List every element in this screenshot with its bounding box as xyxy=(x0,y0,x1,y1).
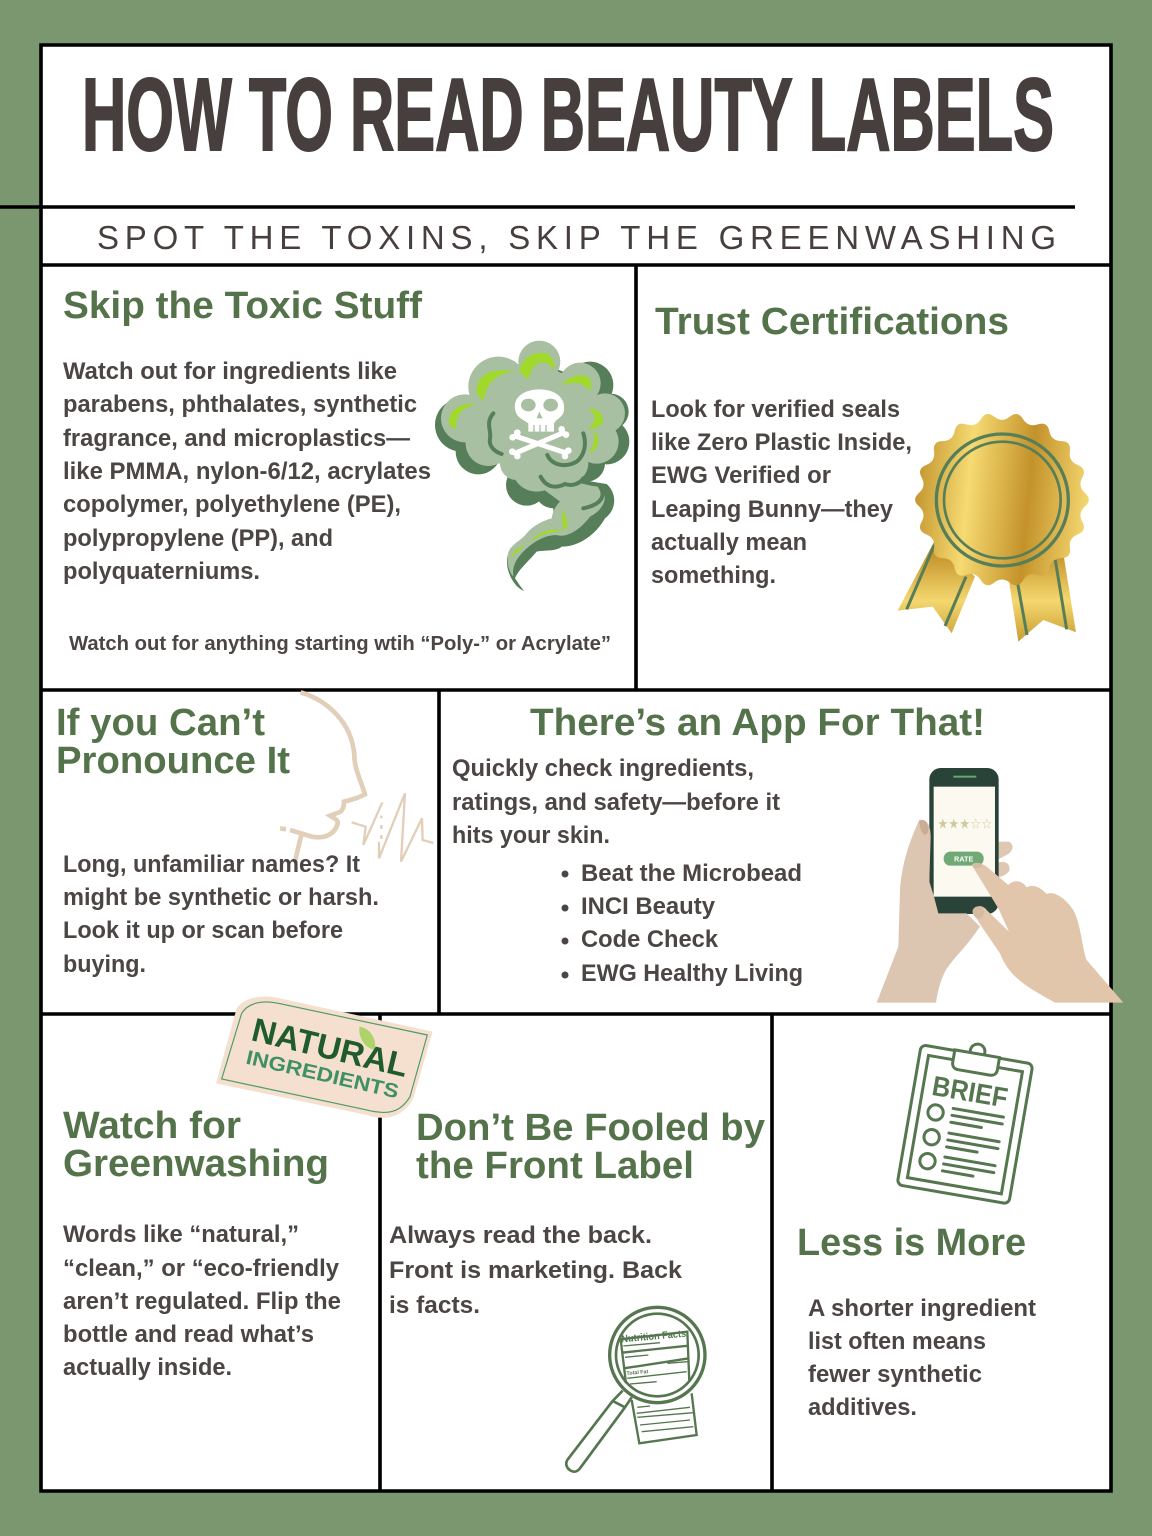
list: recommended apps xyxy=(562,860,803,987)
text block: poly tip: Watch out for anything starting wtih “Poly-” or Acrylate” xyxy=(69,632,611,655)
heading: don't be fooled xyxy=(416,1107,765,1187)
text block: toxic ingredients: copolymer, polyethylene (PE), xyxy=(63,491,401,518)
text block: app intro: ratings, and safety—before it xyxy=(452,789,780,816)
icon: gold award ribbon xyxy=(898,414,1089,642)
skull xyxy=(509,389,572,459)
text block: shorter list: additives. xyxy=(808,1394,917,1421)
heading: trust certifications: Trust Certifications xyxy=(655,301,1009,343)
icon: magnifying glass over nutrition facts: Total Fat xyxy=(626,1369,649,1377)
list: recommended apps: INCI Beauty xyxy=(581,893,715,920)
heading: don't be fooled: the Front Label xyxy=(416,1145,694,1187)
text block: toxic ingredients xyxy=(63,358,431,585)
heading: watch for greenwashing: Greenwashing xyxy=(63,1143,329,1185)
text block: greenwashing: bottle and read what’s xyxy=(63,1321,314,1348)
text block: front label: Front is marketing. Back xyxy=(389,1257,682,1284)
text block: shorter list: fewer synthetic xyxy=(808,1361,982,1388)
text block: front label: is facts. xyxy=(389,1292,480,1319)
text block: certifications: Look for verified seals xyxy=(651,396,900,423)
heading: if you can't pronounce it: If you Can’t xyxy=(56,702,265,744)
icon: hands holding phone: RATE xyxy=(954,854,973,863)
icon: hands holding phone: ★★★☆☆ xyxy=(937,817,992,833)
text block: greenwashing: actually inside. xyxy=(63,1354,232,1381)
icon: clipboard brief xyxy=(897,1035,1035,1204)
icon: hands holding phone xyxy=(877,768,1123,1003)
panel: less is more xyxy=(797,1035,1036,1421)
text block: greenwashing: Words like “natural,” xyxy=(63,1221,299,1248)
text block: toxic ingredients: fragrance, and microplastics— xyxy=(63,425,410,452)
text block: certifications: something. xyxy=(651,562,776,589)
heading: don't be fooled: Don’t Be Fooled by xyxy=(416,1107,765,1149)
icon: clipboard brief: BRIEF xyxy=(930,1070,1010,1114)
text block: pronounce: Look it up or scan before xyxy=(63,917,343,944)
text block: certifications: Leaping Bunny—they xyxy=(651,496,893,523)
text block: toxic ingredients: like PMMA, nylon-6/12, acrylates xyxy=(63,458,431,485)
text block: toxic ingredients: polyquaterniums. xyxy=(63,558,260,585)
panel: don't be fooled by the front label xyxy=(389,1107,765,1472)
icon: natural ingredients sticker xyxy=(216,997,433,1118)
text block: greenwashing: aren’t regulated. Flip the xyxy=(63,1288,341,1315)
text block: toxic ingredients: polypropylene (PP), and xyxy=(63,525,333,552)
text block: toxic ingredients: parabens, phthalates, synthetic xyxy=(63,391,417,418)
panel: if you can't pronounce it xyxy=(56,692,433,978)
icon: toxic smoke cloud with skull xyxy=(435,341,629,591)
panel: there's an app for that xyxy=(452,702,1123,1003)
text block: shorter list xyxy=(808,1295,1036,1421)
panel: trust certifications xyxy=(651,301,1089,642)
list: recommended apps: Code Check xyxy=(581,926,718,953)
text block: greenwashing xyxy=(63,1221,341,1381)
text block: certifications: EWG Verified or xyxy=(651,462,831,489)
text block: pronounce: might be synthetic or harsh. xyxy=(63,884,379,911)
heading: watch for greenwashing: Watch for xyxy=(63,1105,241,1147)
text block: certifications: actually mean xyxy=(651,529,807,556)
icon: natural ingredients sticker: INGREDIENTS xyxy=(244,1047,401,1103)
text block: front label xyxy=(389,1222,682,1319)
text block: front label: Always read the back. xyxy=(389,1222,652,1249)
icon: natural ingredients sticker: NATURAL xyxy=(248,1012,412,1085)
text block: app intro: Quickly check ingredients, xyxy=(452,755,754,782)
text block: shorter list: list often means xyxy=(808,1328,986,1355)
heading: less is more: Less is More xyxy=(797,1222,1026,1264)
text block: app intro xyxy=(452,755,780,849)
heading: skip the toxic stuff: Skip the Toxic Stuff xyxy=(63,285,422,327)
text block: greenwashing: “clean,” or “eco-friendly xyxy=(63,1255,339,1282)
text block: certifications: like Zero Plastic Inside, xyxy=(651,429,912,456)
text block: pronounce: buying. xyxy=(63,951,146,978)
text block: shorter list: A shorter ingredient xyxy=(808,1295,1036,1322)
text block: certifications xyxy=(651,396,912,589)
panel: skip the toxic stuff xyxy=(63,285,629,655)
icon: speaking face profile xyxy=(280,692,433,862)
icon: magnifying glass over nutrition facts: Nutrition Facts xyxy=(621,1329,687,1345)
list: recommended apps: Beat the Microbead xyxy=(581,860,802,887)
heading: if you can't pronounce it xyxy=(56,702,290,782)
text block: pronounce: Long, unfamiliar names? It xyxy=(63,851,360,878)
icon: magnifying glass over nutrition facts xyxy=(566,1307,705,1472)
list: recommended apps: EWG Healthy Living xyxy=(581,960,803,987)
subtitle: SPOT THE TOXINS, SKIP THE GREENWASHING xyxy=(97,219,1056,256)
text block: pronounce xyxy=(63,851,379,978)
text block: app intro: hits your skin. xyxy=(452,822,610,849)
heading: there's an app for that: There’s an App For That! xyxy=(530,702,985,744)
panel: watch for greenwashing xyxy=(63,997,433,1381)
heading: if you can't pronounce it: Pronounce It xyxy=(56,740,290,782)
text block: toxic ingredients: Watch out for ingredients like xyxy=(63,358,397,385)
heading: watch for greenwashing xyxy=(63,1105,329,1185)
